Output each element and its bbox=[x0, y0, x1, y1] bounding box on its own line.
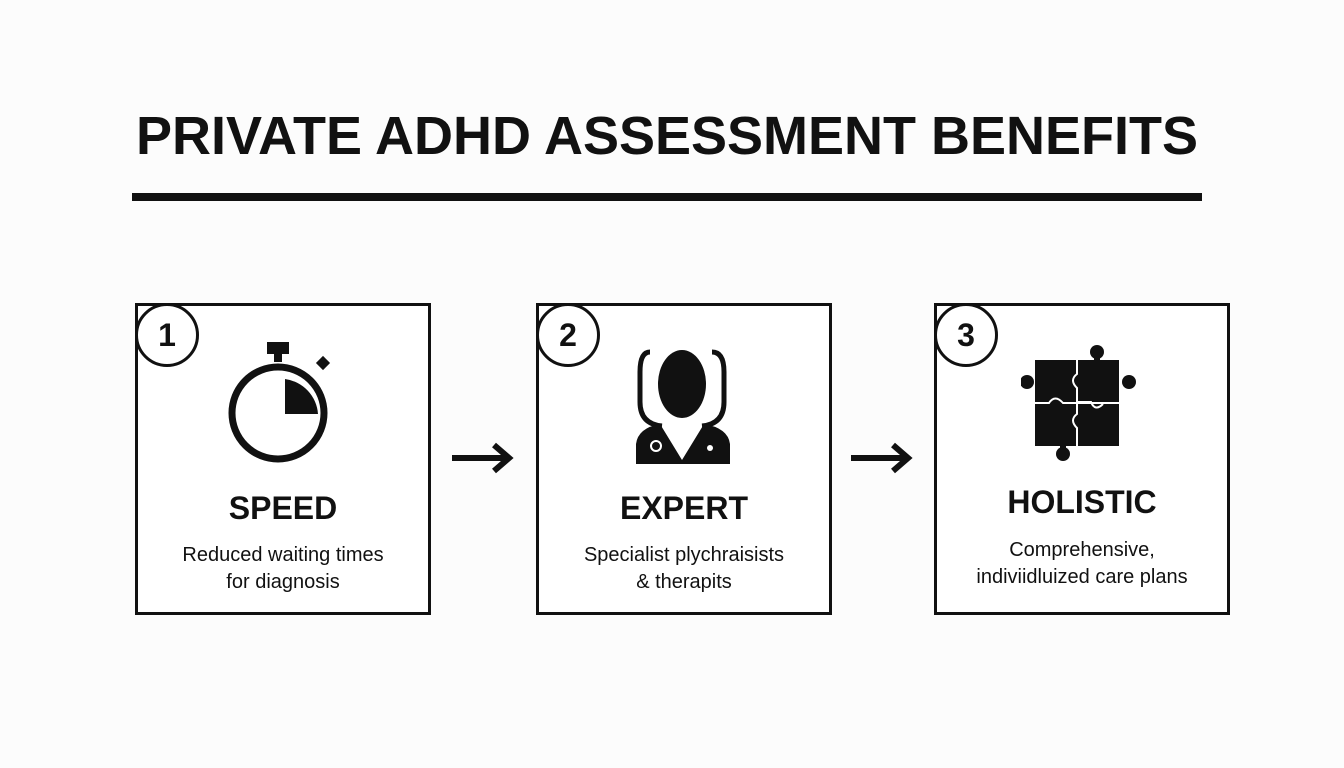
icon: doctor bbox=[636, 350, 730, 464]
description bbox=[182, 544, 384, 593]
number 2 bbox=[536, 303, 600, 367]
title underline bbox=[132, 193, 1202, 201]
description bbox=[584, 544, 784, 593]
description: indiviidluized care plans bbox=[976, 566, 1188, 588]
description: Comprehensive, bbox=[1009, 539, 1155, 561]
icon: puzzle bbox=[1021, 345, 1136, 461]
panel: speed bbox=[135, 303, 431, 615]
arrow 2 bbox=[851, 442, 912, 474]
icon: stopwatch bbox=[228, 342, 330, 462]
description: for diagnosis bbox=[226, 571, 340, 593]
arrow 1 bbox=[452, 442, 514, 474]
number 3 bbox=[934, 303, 998, 367]
heading: EXPERT bbox=[620, 490, 748, 526]
panel: expert bbox=[536, 303, 832, 615]
number 1: 1 bbox=[158, 317, 176, 353]
number 2: 2 bbox=[559, 317, 577, 353]
description: Reduced waiting times bbox=[182, 544, 384, 566]
heading: HOLISTIC bbox=[1007, 484, 1157, 520]
panel: holistic bbox=[934, 303, 1230, 615]
heading: SPEED bbox=[229, 490, 337, 526]
description bbox=[976, 539, 1188, 588]
description: Specialist plychraisists bbox=[584, 544, 784, 566]
title: PRIVATE ADHD ASSESSMENT BENEFITS bbox=[136, 106, 1198, 166]
number 1 bbox=[135, 303, 199, 367]
description: & therapits bbox=[636, 571, 732, 593]
number 3: 3 bbox=[957, 317, 975, 353]
